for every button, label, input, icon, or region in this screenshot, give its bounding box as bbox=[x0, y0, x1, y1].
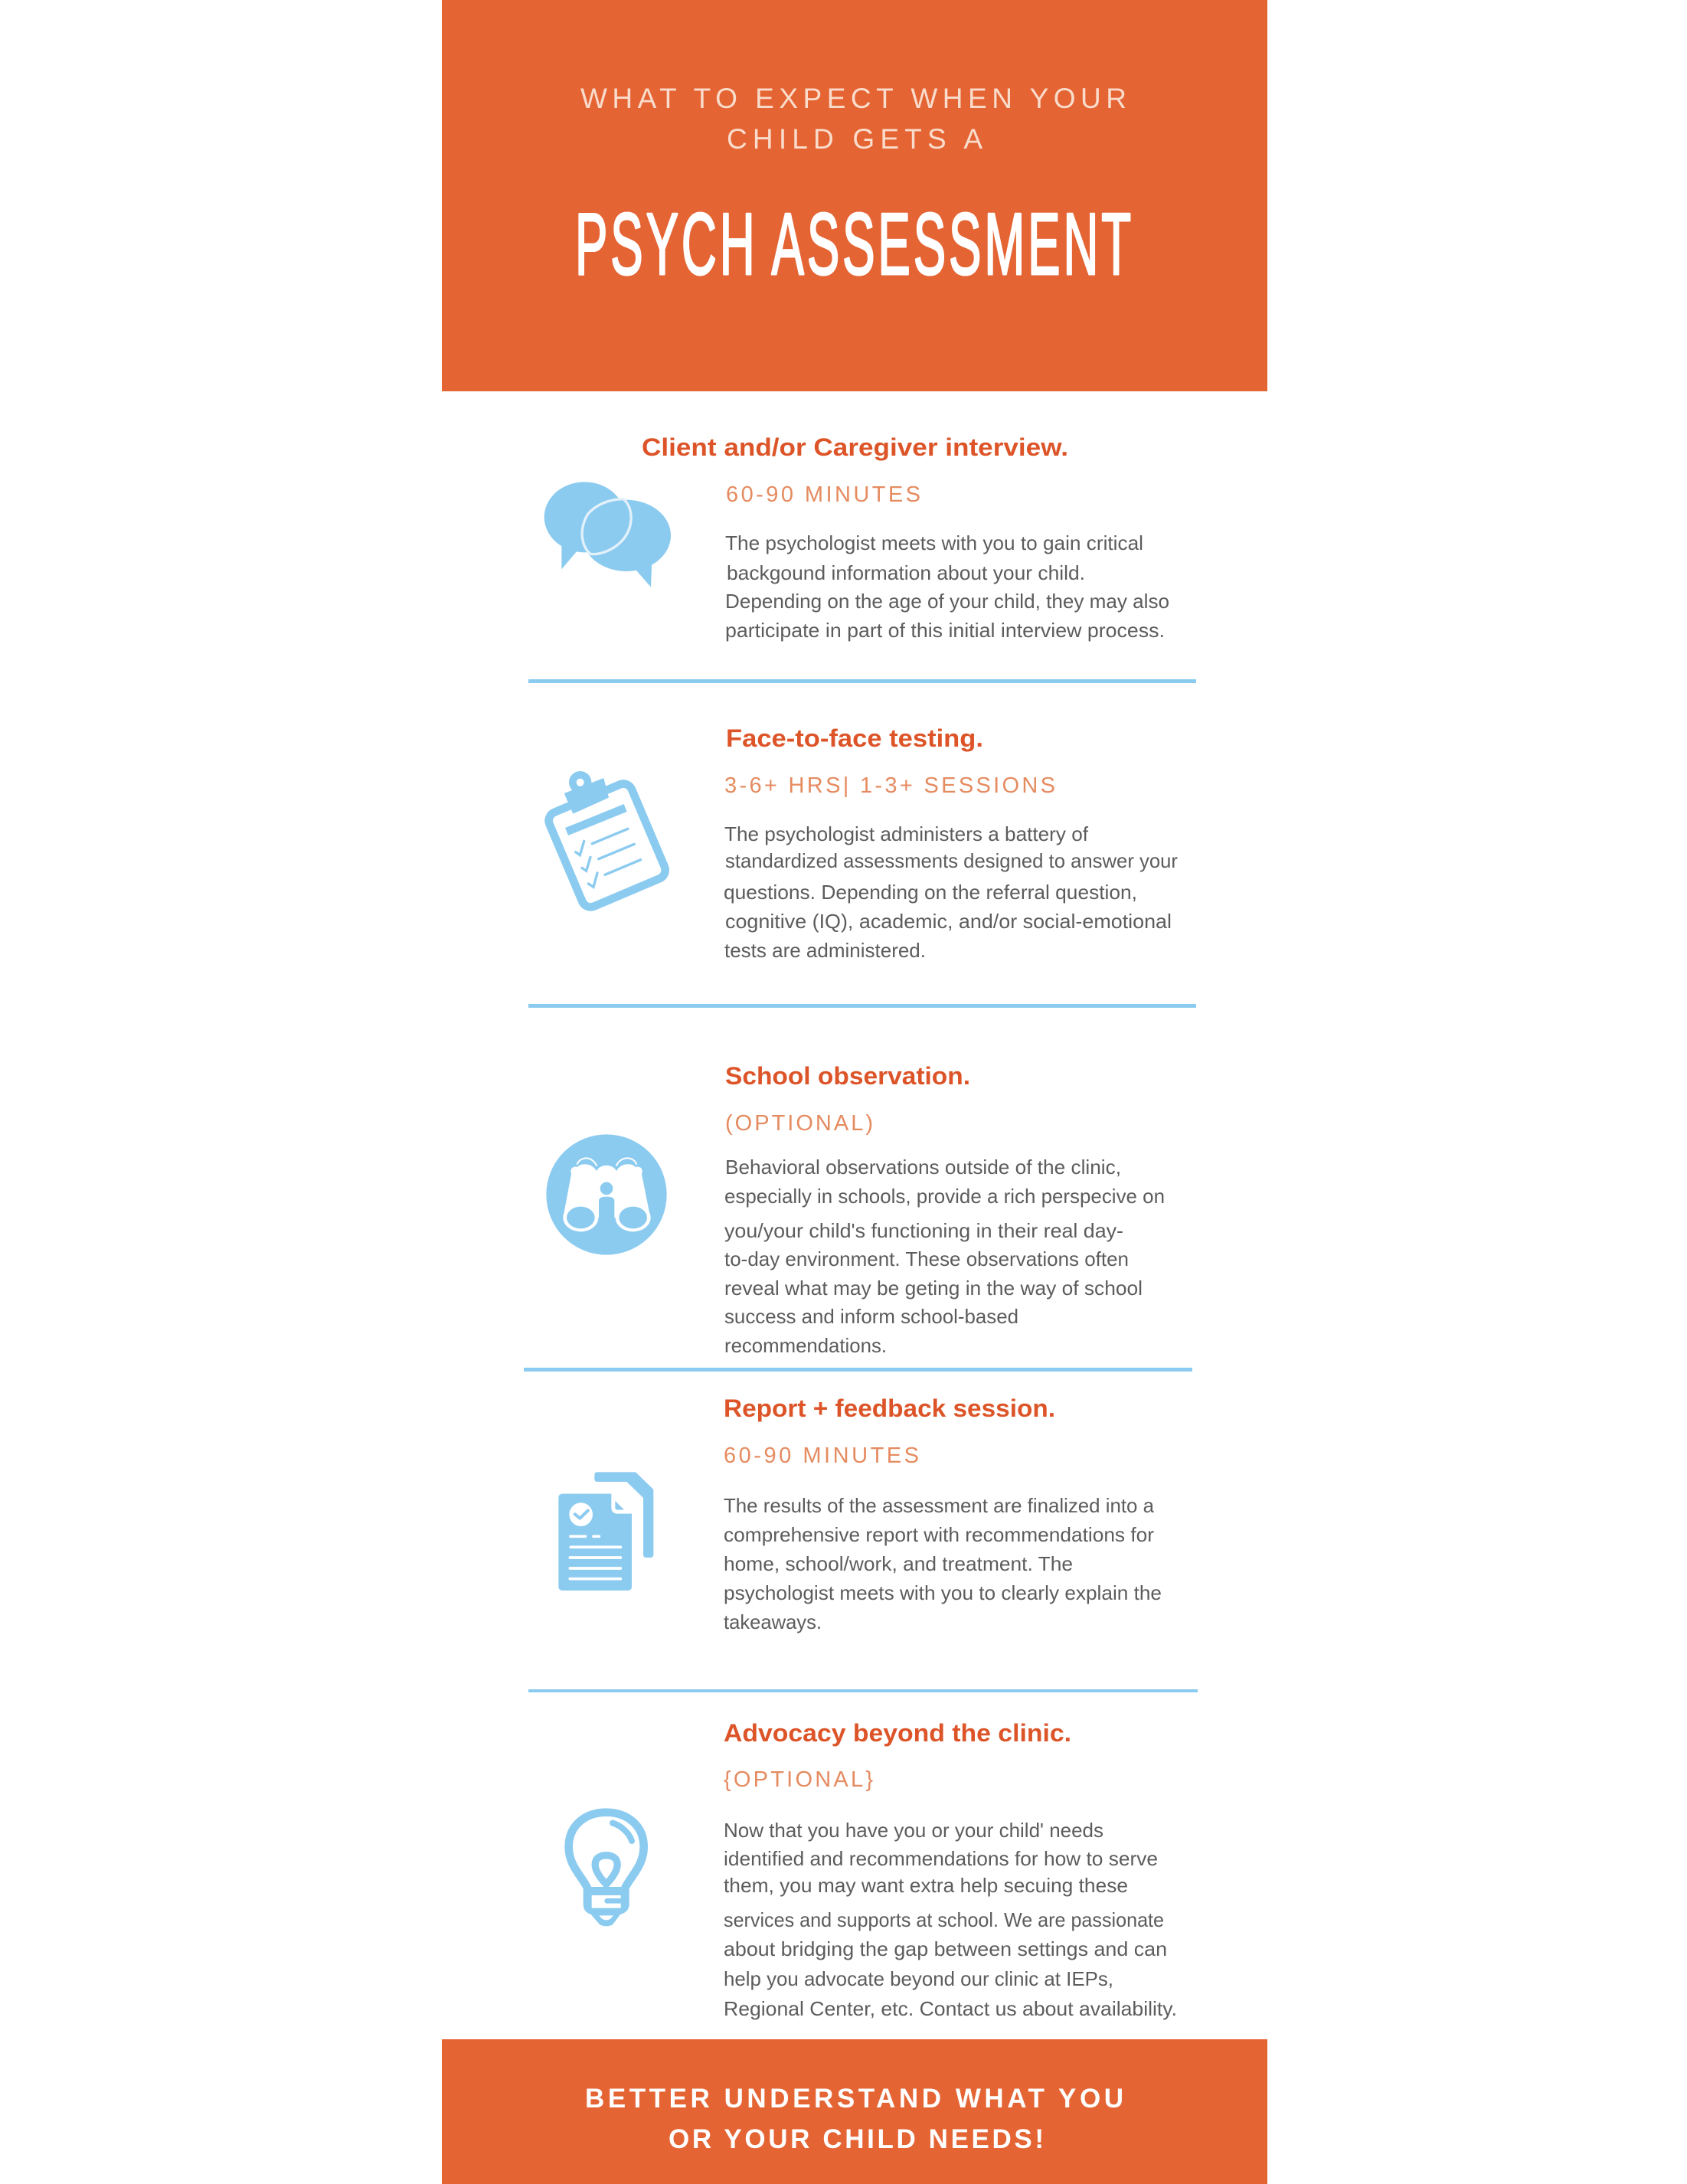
body text: questions. Depending on the referral question, bbox=[724, 881, 1137, 904]
icon: binoculars bbox=[546, 1134, 667, 1255]
duration: (OPTIONAL) bbox=[725, 1111, 873, 1136]
heading: Report + feedback session. bbox=[724, 1394, 1055, 1422]
body text: identified and recommendations for how to serve bbox=[724, 1847, 1158, 1870]
duration: 60-90 MINUTES bbox=[724, 1443, 919, 1468]
body text: recommendations. bbox=[724, 1334, 887, 1357]
body text: tests are administered. bbox=[724, 939, 926, 962]
duration: {OPTIONAL} bbox=[724, 1767, 873, 1792]
panel: header banner bbox=[442, 0, 1267, 391]
body text: especially in schools, provide a rich perspecive on bbox=[724, 1185, 1165, 1208]
body text: Now that you have you or your child' needs bbox=[724, 1819, 1103, 1842]
heading: Client and/or Caregiver interview. bbox=[642, 433, 1068, 461]
body text bbox=[724, 822, 1178, 962]
icon: documents bbox=[558, 1472, 653, 1591]
heading: Advocacy beyond the clinic. bbox=[724, 1719, 1071, 1747]
panel: step 4 report and feedback bbox=[558, 1394, 1162, 1633]
body text: them, you may want extra help secuing these bbox=[724, 1874, 1128, 1897]
body text: The psychologist meets with you to gain critical bbox=[725, 531, 1143, 554]
kicker heading: CHILD GETS A bbox=[727, 123, 982, 155]
body text bbox=[725, 531, 1169, 642]
body text: to-day environment. These observations often bbox=[724, 1247, 1129, 1270]
heading: Face-to-face testing. bbox=[726, 724, 983, 752]
icon: speech bubbles bbox=[544, 482, 671, 587]
body text: help you advocate beyond our clinic at IEPs, bbox=[724, 1967, 1113, 1990]
body text: cognitive (IQ), academic, and/or social-emotional bbox=[725, 910, 1172, 933]
icon: light bulb bbox=[569, 1813, 644, 1926]
body text: comprehensive report with recommendations for bbox=[724, 1523, 1154, 1546]
body text: The psychologist administers a battery of bbox=[724, 822, 1089, 845]
icon: clipboard bbox=[546, 771, 668, 910]
body text: services and supports at school. We are passionate bbox=[724, 1908, 1164, 1931]
kicker heading: WHAT TO EXPECT WHEN YOUR bbox=[580, 83, 1126, 114]
panel: step 3 school observation bbox=[546, 1062, 1165, 1357]
panel: step 5 advocacy bbox=[569, 1719, 1177, 2020]
panel: footer banner bbox=[442, 2039, 1267, 2184]
heading: School observation. bbox=[725, 1062, 970, 1090]
body text: you/your child's functioning in their real day- bbox=[724, 1219, 1123, 1242]
body text: about bridging the gap between settings and can bbox=[724, 1937, 1167, 1960]
body text: Depending on the age of your child, they may also bbox=[725, 590, 1169, 613]
title: PSYCH ASSESSMENT bbox=[575, 196, 1134, 293]
body text: participate in part of this initial interview process. bbox=[725, 619, 1165, 642]
body text bbox=[724, 1819, 1177, 2020]
panel: step 2 face-to-face testing bbox=[546, 724, 1178, 962]
body text: success and inform school-based bbox=[724, 1305, 1018, 1328]
body text: backgound information about your child. bbox=[727, 561, 1085, 584]
body text: The results of the assessment are finalized into a bbox=[724, 1494, 1155, 1517]
body text: Behavioral observations outside of the clinic, bbox=[725, 1156, 1121, 1179]
body text bbox=[724, 1494, 1162, 1633]
footer call to action bbox=[585, 2084, 1123, 2154]
body text: takeaways. bbox=[724, 1610, 822, 1633]
footer call to action: OR YOUR CHILD NEEDS! bbox=[669, 2124, 1044, 2154]
body text: reveal what may be geting in the way of school bbox=[724, 1277, 1143, 1300]
footer call to action: BETTER UNDERSTAND WHAT YOU bbox=[585, 2084, 1123, 2114]
duration: 60-90 MINUTES bbox=[726, 482, 920, 507]
body text bbox=[724, 1156, 1165, 1357]
body text: home, school/work, and treatment. The bbox=[724, 1552, 1073, 1575]
panel: step 1 client interview bbox=[544, 433, 1169, 642]
body text: psychologist meets with you to clearly explain the bbox=[724, 1581, 1162, 1604]
duration: 3-6+ HRS| 1-3+ SESSIONS bbox=[724, 773, 1055, 798]
kicker heading bbox=[580, 83, 1126, 155]
body text: Regional Center, etc. Contact us about availability. bbox=[724, 1997, 1177, 2020]
body text: standardized assessments designed to answer your bbox=[725, 849, 1178, 872]
